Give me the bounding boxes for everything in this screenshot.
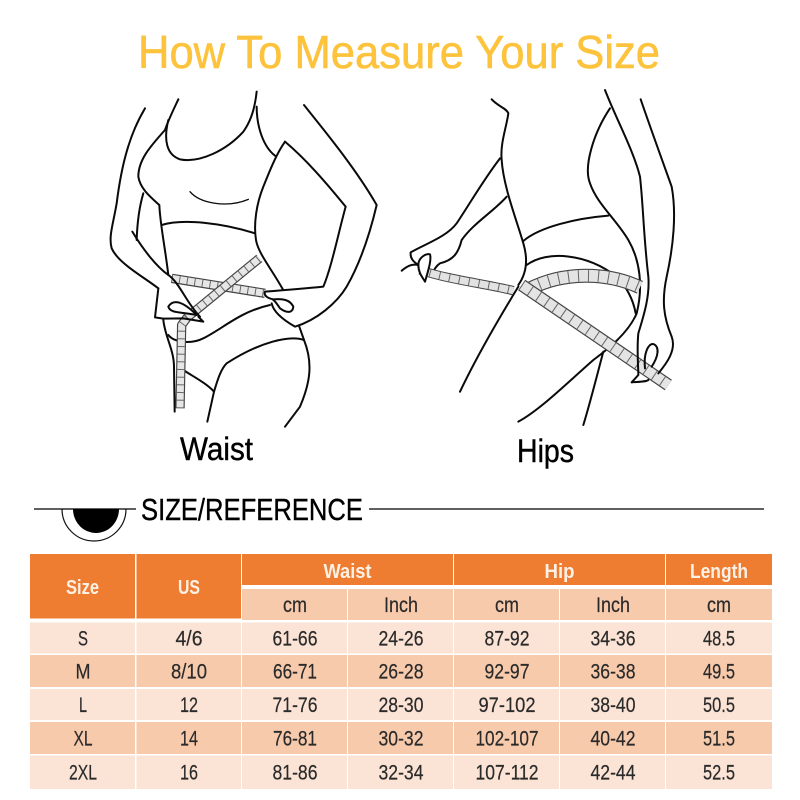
row: M: 66-71 <box>273 660 317 684</box>
row: L <box>30 689 772 720</box>
title: How To Measure Your Size <box>138 26 660 78</box>
section heading: size reference: SIZE/REFERENCE <box>141 492 363 527</box>
table header <box>30 554 772 620</box>
table header: Inch <box>384 594 418 617</box>
table header: Inch <box>596 594 630 617</box>
row: XL: 76-81 <box>273 728 317 750</box>
row: S: 61-66 <box>272 628 318 650</box>
label: Waist: Waist <box>180 431 253 467</box>
illustration: waist measurement <box>111 92 377 427</box>
row: XL: 14 <box>180 728 198 750</box>
label: Hips: Hips <box>517 433 574 469</box>
row: XL: 40-42 <box>590 728 636 750</box>
row: L: 38-40 <box>590 694 636 717</box>
row: L: 28-30 <box>378 694 424 717</box>
row: M: 26-28 <box>378 660 424 684</box>
row: 2XL: 16 <box>180 762 198 784</box>
row: L: 12 <box>180 694 198 717</box>
row: L: 97-102 <box>478 694 536 717</box>
row: S: 87-92 <box>484 628 530 650</box>
row: XL: 51.5 <box>703 728 735 750</box>
row: L: 50.5 <box>703 694 735 717</box>
row: S: 24-26 <box>378 628 424 650</box>
row: L: 71-76 <box>272 694 318 717</box>
row: S: 34-36 <box>590 628 636 650</box>
row: M: M <box>76 660 90 684</box>
row: S: 4/6 <box>176 628 202 650</box>
illustration: hips measurement <box>402 90 674 425</box>
row: 2XL <box>30 756 772 789</box>
row: 2XL: 81-86 <box>272 762 318 784</box>
row: 2XL: 2XL <box>69 762 97 784</box>
tape measure: waist <box>172 258 265 408</box>
row: XL <box>30 722 772 754</box>
table header: cm <box>283 594 307 617</box>
row: M: 92-97 <box>484 660 530 684</box>
row: 2XL: 42-44 <box>590 762 636 784</box>
row: XL: XL <box>74 728 92 750</box>
size table <box>30 554 772 789</box>
row: S <box>30 622 772 654</box>
row: L: L <box>79 694 87 717</box>
table header: Size <box>66 577 99 599</box>
row: S: S <box>78 628 88 650</box>
hands and arm <box>402 90 674 382</box>
table header: Waist <box>324 561 372 583</box>
table header: Length <box>690 561 748 583</box>
row: 2XL: 107-112 <box>476 762 538 784</box>
section heading: size reference <box>34 492 764 541</box>
table header: US <box>178 577 200 599</box>
row: 2XL: 52.5 <box>703 762 735 784</box>
row: M: 8/10 <box>171 660 207 684</box>
table header: cm <box>495 594 519 617</box>
icon: half circle badge <box>62 509 126 541</box>
row: S: 48.5 <box>703 628 735 650</box>
row: M: 49.5 <box>703 660 735 684</box>
hands and arm <box>132 105 377 327</box>
table header: Hip <box>544 561 574 583</box>
row: XL: 102-107 <box>476 728 538 750</box>
tape measure: hips <box>420 270 668 385</box>
row: 2XL: 32-34 <box>378 762 424 784</box>
row: M <box>30 655 772 687</box>
row: XL: 30-32 <box>378 728 424 750</box>
table header: cm <box>707 594 731 617</box>
row: M: 36-38 <box>590 660 636 684</box>
